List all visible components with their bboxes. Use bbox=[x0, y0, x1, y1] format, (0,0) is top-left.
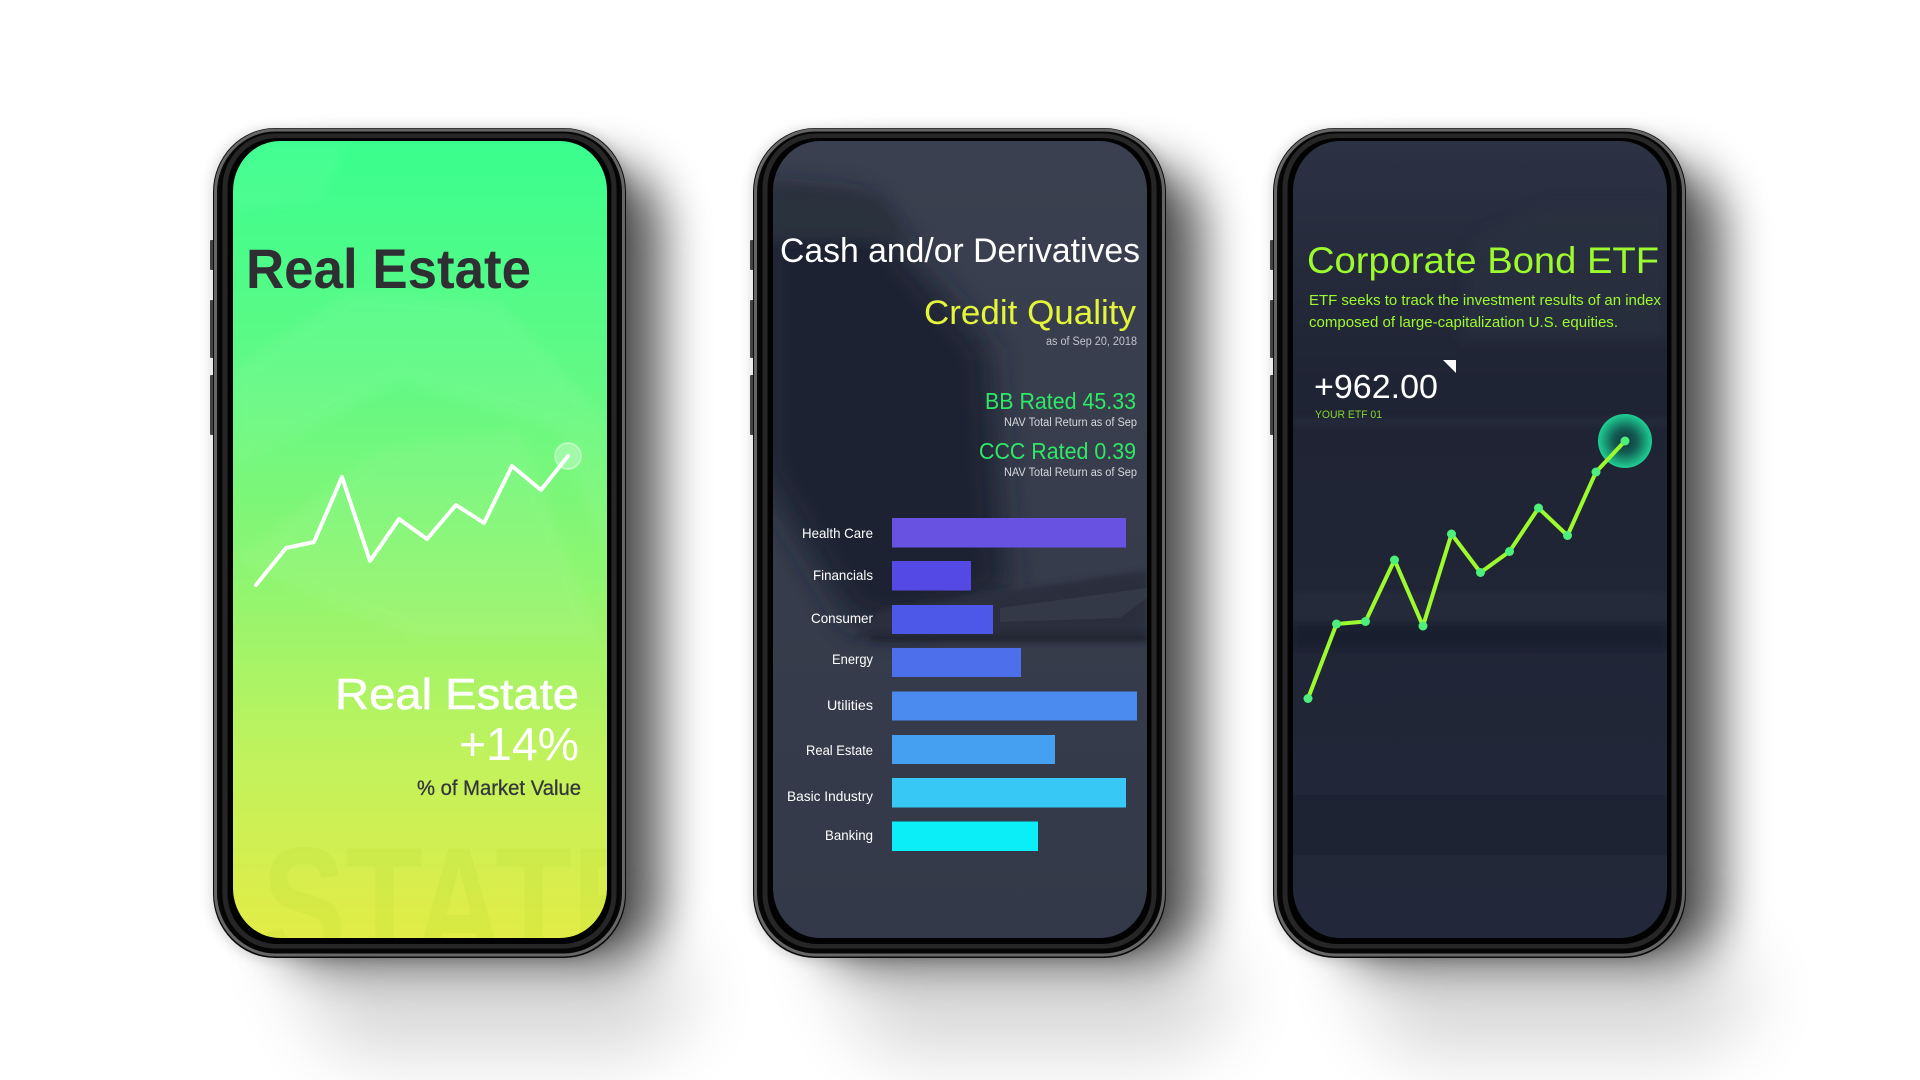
chart line bbox=[256, 456, 568, 585]
panel: real estate phone bbox=[210, 128, 626, 958]
chart points bbox=[1304, 436, 1630, 703]
bar: Energy: Energy bbox=[832, 651, 873, 667]
phone shadows bbox=[211, 128, 1760, 1050]
chart end glow bbox=[1598, 414, 1652, 468]
bar: Health Care bbox=[802, 518, 1126, 548]
stat: CCC Rated: CCC Rated 0.39 bbox=[979, 438, 1136, 464]
heading: Corporate Bond ETF: Corporate Bond ETF bbox=[1307, 240, 1659, 281]
text: description bbox=[1309, 292, 1661, 331]
screen: credit quality bbox=[760, 141, 1147, 938]
stat: CCC Rated: NAV Total Return as of Sep bbox=[1004, 467, 1137, 479]
text: Real Estate value: Real Estate bbox=[335, 670, 579, 719]
phone frame: real estate bbox=[210, 128, 627, 958]
bar: Consumer: Consumer bbox=[811, 610, 873, 626]
line chart: ETF trend bbox=[1304, 414, 1652, 703]
label: YOUR ETF 01: YOUR ETF 01 bbox=[1315, 409, 1382, 421]
line chart: real estate trend bbox=[256, 443, 581, 585]
bar: Basic Industry bbox=[787, 778, 1126, 808]
bar: Banking bbox=[825, 822, 1038, 851]
stat: BB Rated bbox=[985, 388, 1137, 429]
text: +14%: +14% bbox=[459, 718, 579, 770]
heading: Credit Quality: Credit Quality bbox=[924, 294, 1136, 332]
heading: Cash and/or Derivatives: Cash and/or Derivatives bbox=[780, 232, 1140, 270]
stat: +962.00: +962.00 bbox=[1314, 368, 1438, 405]
panel: credit quality phone bbox=[750, 128, 1167, 958]
bar: Consumer bbox=[811, 605, 993, 634]
bar: Utilities bbox=[827, 692, 1137, 720]
text: description: ETF seeks to track the investment results of an index bbox=[1309, 292, 1661, 309]
heading: Real Estate: Real Estate bbox=[246, 237, 531, 300]
panel: corporate bond phone bbox=[1270, 128, 1687, 958]
screen: real estate: STATE bbox=[262, 813, 656, 997]
stat: BB Rated: BB Rated 45.33 bbox=[985, 388, 1136, 414]
bar: Banking: Banking bbox=[825, 827, 873, 843]
phone frame: credit quality bbox=[750, 128, 1167, 958]
chart end marker bbox=[555, 443, 581, 469]
bar: Utilities: Utilities bbox=[827, 697, 873, 713]
bar: Real Estate: Real Estate bbox=[806, 742, 873, 758]
bar: Basic Industry: Basic Industry bbox=[787, 788, 873, 804]
text: description: composed of large-capitalization U.S. equities. bbox=[1309, 314, 1618, 331]
stat: CCC Rated bbox=[979, 438, 1137, 479]
text: date: as of Sep 20, 2018 bbox=[1046, 336, 1137, 348]
text: % of Market Value: % of Market Value bbox=[417, 777, 581, 800]
bar chart: sectors bbox=[787, 518, 1137, 851]
bar: Health Care: Health Care bbox=[802, 525, 873, 541]
bar: Real Estate bbox=[806, 735, 1055, 764]
bar: Financials: Financials bbox=[813, 567, 873, 583]
phone frame: corporate bond bbox=[1270, 128, 1687, 958]
bar: Financials bbox=[813, 561, 971, 590]
icon: corner triangle bbox=[1443, 360, 1456, 373]
chart line bbox=[1308, 441, 1625, 698]
bar: Energy bbox=[832, 648, 1021, 677]
screen: corporate bond bbox=[1293, 141, 1667, 938]
screen: real estate bbox=[233, 141, 607, 938]
stat: BB Rated: NAV Total Return as of Sep bbox=[1004, 417, 1137, 429]
